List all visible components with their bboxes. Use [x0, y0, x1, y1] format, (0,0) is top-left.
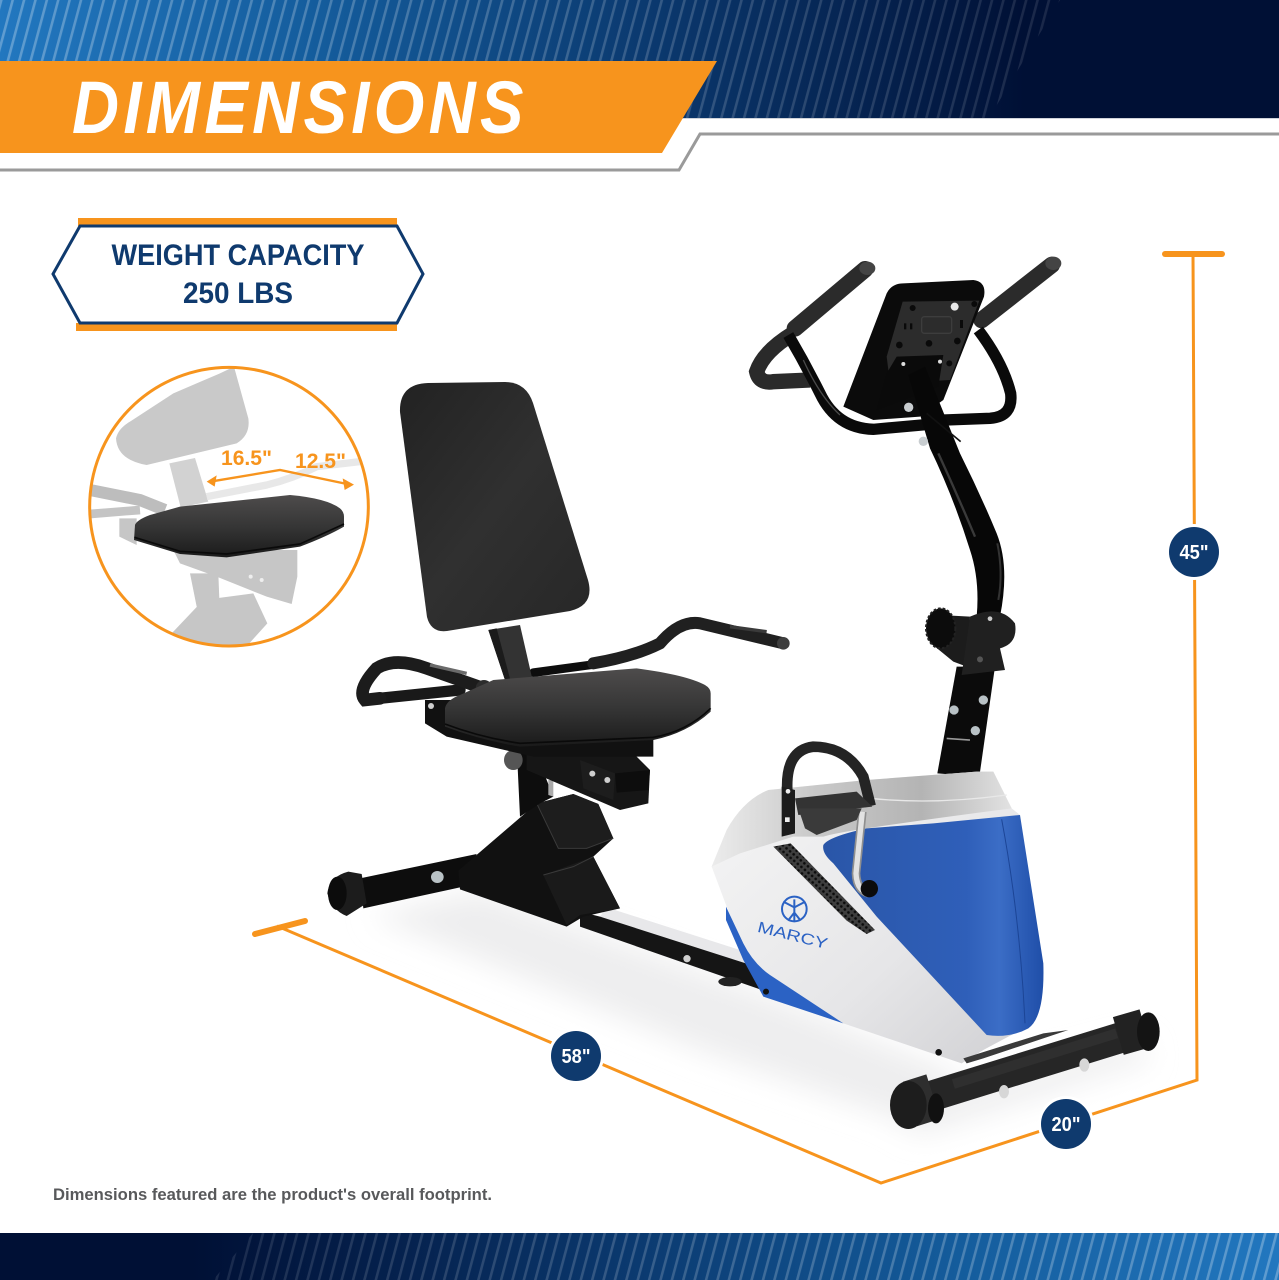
- 20 inch label: 20": [1052, 1114, 1080, 1136]
- faded seat post: [169, 458, 208, 507]
- silver top cover: [712, 772, 1012, 867]
- lower blue trim: [726, 907, 843, 1023]
- faded backrest: [116, 367, 249, 465]
- base bracket: [458, 794, 620, 927]
- clamp: [962, 611, 1016, 675]
- pedal: [787, 747, 871, 806]
- seat depth label: 16.5": [221, 447, 272, 470]
- faded base and bracket: [119, 518, 297, 650]
- front foot bar: [913, 1033, 1137, 1102]
- white side panel: [712, 772, 1033, 1063]
- console tower and handlebars: [757, 257, 1061, 777]
- blue housing: [823, 815, 1043, 1036]
- exercise bike product illustration: [327, 257, 1160, 1129]
- rear foot: [360, 854, 477, 908]
- dimension lines: [255, 254, 1222, 1183]
- seat cushion: [445, 668, 711, 747]
- logo wordmark: MARCY: [756, 919, 829, 953]
- lower stem: [937, 667, 995, 777]
- seat detail inset: [90, 367, 368, 650]
- 58 inch label: 58": [562, 1046, 590, 1068]
- weight capacity badge: [53, 218, 423, 331]
- rear curved handle: [757, 333, 810, 382]
- height knob: [935, 615, 970, 667]
- rear frame and rail: [327, 623, 790, 992]
- crank arm: [856, 812, 868, 893]
- 45 inch label: [1166, 524, 1222, 580]
- title banner: [0, 61, 717, 153]
- 20 inch label: [1038, 1096, 1094, 1152]
- measurement arrows: [207, 470, 354, 490]
- console: [843, 280, 984, 420]
- vent grille: [773, 843, 875, 934]
- rear arm rest: [363, 623, 783, 700]
- seat slider: [527, 747, 650, 810]
- rail beam: [580, 912, 767, 992]
- 45 inch label: 45": [1180, 542, 1208, 564]
- backrest: [400, 382, 590, 631]
- floor shadow: [370, 890, 1150, 1135]
- footnote: Dimensions featured are the product's overall footprint.: [53, 1185, 492, 1204]
- flywheel housing: [712, 747, 1160, 1129]
- under seat pan: [425, 700, 653, 757]
- seat width label: 12.5": [295, 450, 346, 473]
- length end cap: [255, 921, 305, 934]
- footer band: [0, 1233, 1279, 1280]
- title: DIMENSIONS: [72, 66, 523, 149]
- foot mount plate: [963, 1030, 1068, 1063]
- weight value: 250 LBS: [183, 277, 293, 310]
- stem: [908, 367, 1004, 617]
- handle grips: [795, 269, 865, 328]
- height end cap: [1165, 251, 1222, 257]
- faded arm rests: [90, 462, 360, 514]
- 58 inch label: [548, 1028, 604, 1084]
- seat cushion: [134, 495, 344, 557]
- rail plate: [600, 907, 753, 970]
- circle frame: [90, 367, 368, 646]
- header band: [0, 0, 1279, 119]
- seat column: [517, 747, 553, 817]
- logo emblem: [782, 897, 807, 921]
- seat post: [488, 625, 533, 685]
- front handlebars: [788, 330, 1011, 429]
- grey header rule: [0, 134, 1279, 170]
- weight capacity text: WEIGHT CAPACITY: [112, 239, 364, 272]
